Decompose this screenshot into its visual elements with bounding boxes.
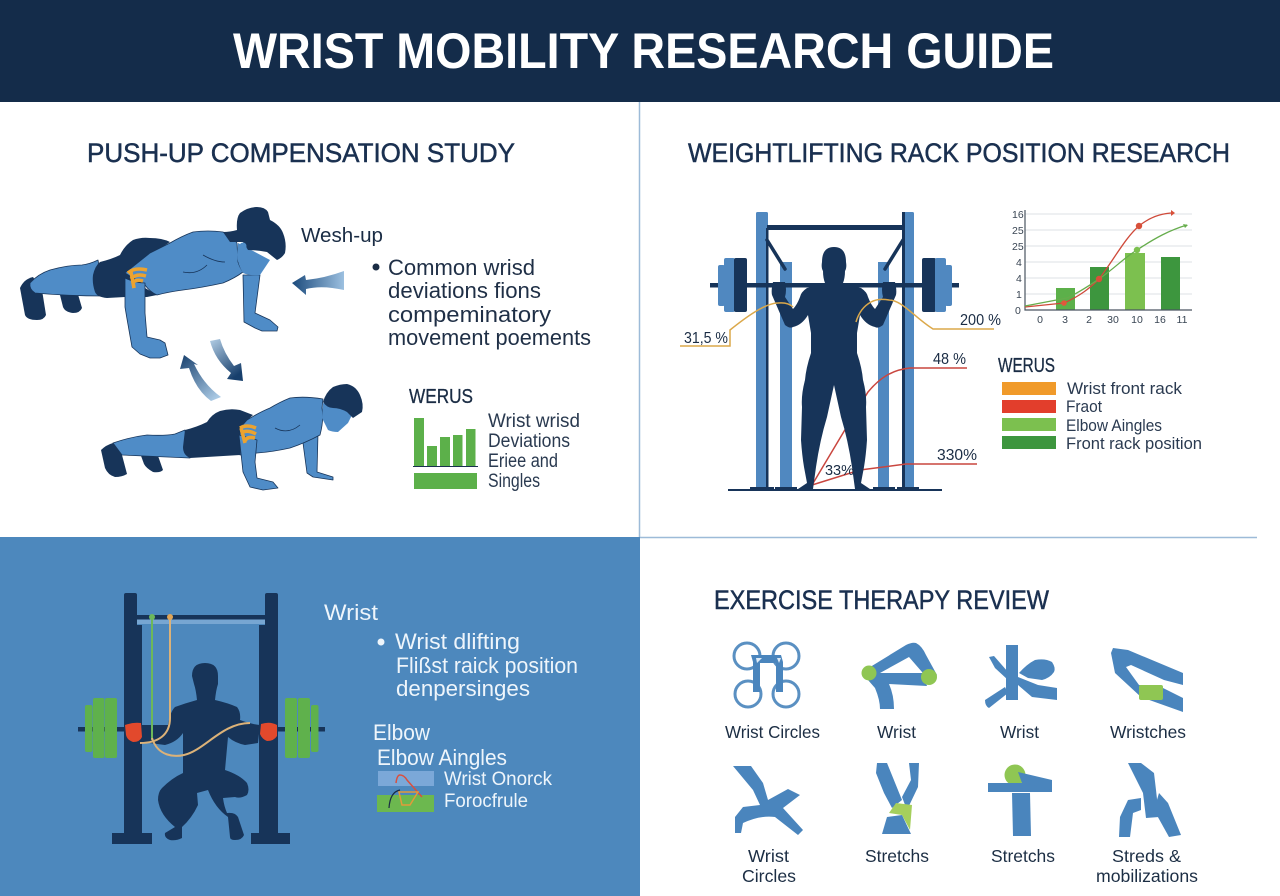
chart axis labels: 16: [1154, 314, 1166, 326]
chart axis labels: 16: [1012, 209, 1024, 221]
text block: elbow notes: Forocfrule: [444, 791, 528, 812]
chart axis labels: 11: [1177, 314, 1188, 326]
arrow: curved upward: [180, 355, 221, 401]
chart axis labels: 25: [1012, 225, 1024, 237]
icon: stretch mobilization: [1119, 763, 1181, 837]
percent labels: 31,5 %: [684, 330, 728, 347]
text block: wrist notes: [324, 600, 578, 701]
percent labels: 330%: [937, 447, 977, 464]
chart axis labels: [1012, 209, 1188, 326]
legend: Elbow Aingles: [1066, 416, 1162, 435]
panel: exercise therapy review: [714, 585, 1198, 886]
arrow: curved downward: [210, 339, 243, 381]
icon: stretch horizontal: [988, 764, 1052, 836]
panel: push-up compensation study: [20, 138, 591, 492]
illustration: rack: [710, 212, 959, 491]
heading: exercise therapy: EXERCISE THERAPY REVIEW: [714, 585, 1049, 615]
icon: shoulder highlight: [240, 426, 256, 443]
percent labels: 48 %: [933, 351, 966, 368]
heading: weightlifting: WEIGHTLIFTING RACK POSITION RESEARCH: [688, 138, 1230, 168]
title: WRIST MOBILITY RESEARCH GUIDE: [233, 23, 1054, 79]
chart axis labels: 0: [1037, 314, 1043, 326]
exercise labels: Stretchs: [865, 846, 929, 866]
figure: lower push-up: [101, 384, 363, 490]
exercise labels: Wrist: [877, 722, 916, 742]
legend: WERUS: [998, 355, 1055, 377]
text block: elbow notes: Elbow: [373, 720, 430, 745]
legend swatches with curve: [377, 771, 434, 812]
text block: chart legend: Singles: [488, 471, 540, 492]
exercise labels: Wristches: [1110, 722, 1186, 742]
silhouette: squatting lifter: [142, 663, 260, 840]
label: wesh-up: Wesh-up: [301, 225, 383, 247]
exercise labels: Streds &: [1112, 846, 1181, 866]
chart axis labels: 1: [1016, 289, 1022, 301]
chart axis labels: 10: [1131, 314, 1143, 326]
percent labels: [684, 312, 1001, 479]
label: werus: WERUS: [409, 386, 473, 408]
chart axis labels: 25: [1012, 241, 1024, 253]
icon: wrist stretch 1: [862, 643, 937, 709]
text block: bullet description: Common wrisd: [388, 255, 535, 280]
callout lines: orange: [680, 299, 994, 346]
text block: chart legend: Wrist wrisd: [488, 411, 580, 432]
chart axis labels: 30: [1107, 314, 1119, 326]
text block: wrist notes: Flißst raick position: [396, 653, 578, 678]
arrow: toward upper figure: [292, 271, 344, 295]
icon: wrist stretch 2: [985, 645, 1057, 708]
text block: bullet description: deviations fions: [388, 278, 541, 303]
text block: wrist notes: Wrist dlifting: [395, 629, 520, 654]
exercise labels: Wrist: [748, 846, 789, 866]
panel: weightlifting rack position research: [680, 138, 1230, 491]
text block: elbow notes: [373, 720, 552, 812]
text block: elbow notes: Elbow Aingles: [377, 745, 507, 770]
icon: stretch forearm: [876, 763, 919, 834]
resistance bands: [140, 617, 250, 756]
icon: wrist circles: [734, 643, 799, 707]
exercise labels: Stretchs: [991, 846, 1055, 866]
text block: chart legend: [488, 411, 580, 492]
legend: Front rack position: [1066, 434, 1202, 453]
chart axis labels: 2: [1086, 314, 1092, 326]
text block: bullet description: movement poements: [388, 325, 591, 350]
text block: chart legend: Deviations: [488, 431, 570, 452]
exercise labels: mobilizations: [1096, 866, 1198, 886]
text block: bullet description: [372, 255, 591, 350]
percent labels: 200 %: [960, 312, 1001, 329]
panel: blue front rack squat: [0, 537, 640, 896]
icon: red hands: [125, 723, 277, 742]
text block: wrist notes: Wrist: [324, 600, 378, 625]
percent labels: 33%: [825, 462, 854, 479]
icon: wrist cross: [733, 766, 803, 835]
legend: Wrist front rack: [1067, 379, 1182, 398]
exercise labels: Wrist Circles: [725, 722, 820, 742]
figure: upper push-up: [20, 207, 286, 358]
exercise labels: Circles: [742, 866, 796, 886]
chart axis labels: 0: [1015, 305, 1021, 317]
illustration: squat rack: [78, 593, 325, 844]
header banner: [0, 0, 1280, 102]
text block: elbow notes: Wrist Onorck: [444, 769, 552, 790]
legend: Fraot: [1066, 397, 1102, 416]
text block: bullet description: compeminatory: [388, 302, 551, 327]
exercise labels: Wrist: [1000, 722, 1039, 742]
text block: chart legend: Eriee and: [488, 451, 558, 472]
exercise labels: [725, 722, 1198, 886]
combo chart: [1012, 209, 1192, 326]
text block: wrist notes: denpersinges: [396, 676, 530, 701]
legend: [998, 355, 1202, 453]
heading: push-up: PUSH-UP COMPENSATION STUDY: [87, 138, 515, 168]
chart axis labels: 4: [1016, 273, 1022, 285]
bar chart: green deviations: [413, 418, 478, 489]
icon: shoulder highlight: [128, 269, 147, 288]
icon: wristches: [1111, 648, 1183, 712]
silhouette: lifter: [772, 247, 896, 489]
chart axis labels: 4: [1016, 257, 1022, 269]
chart axis labels: 3: [1062, 314, 1068, 326]
callout lines: red: [812, 368, 977, 485]
